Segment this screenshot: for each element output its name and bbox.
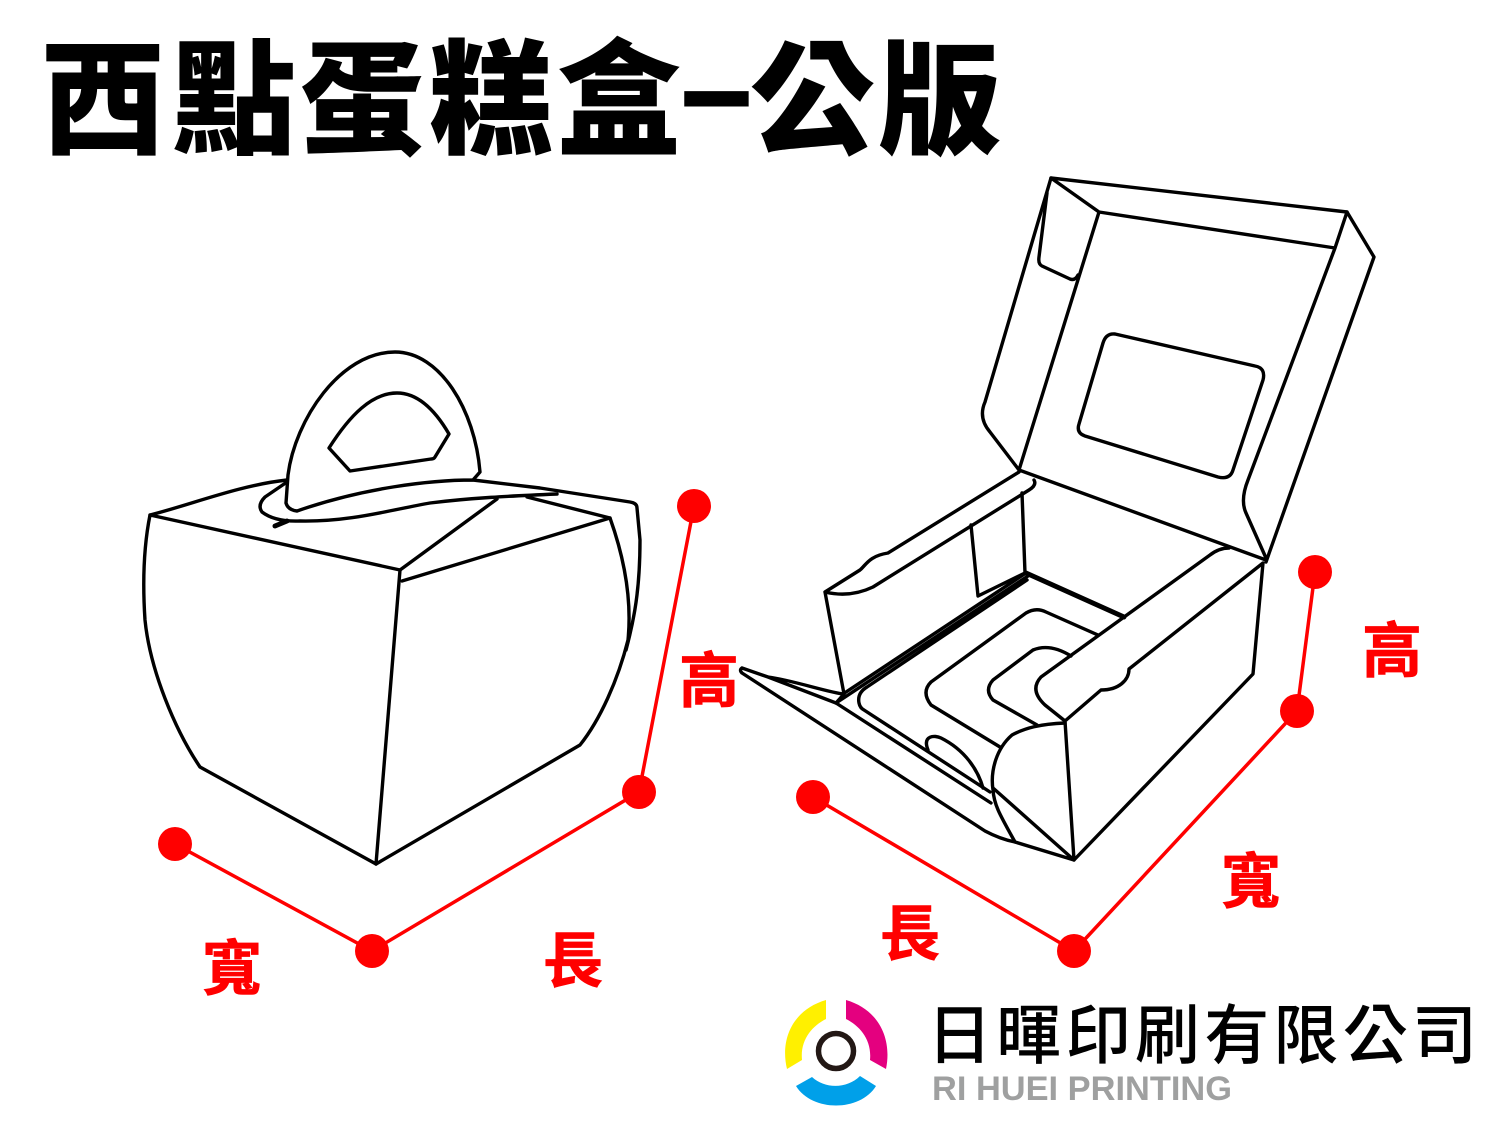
dimension lines: open box bbox=[796, 555, 1332, 968]
lid outer bbox=[982, 178, 1374, 562]
dimension lines: closed box bbox=[158, 489, 711, 968]
title: 公版 bbox=[750, 33, 1002, 171]
inner tray rim bbox=[836, 573, 1028, 792]
right flap bbox=[1036, 548, 1263, 860]
label: height, closed box: 高 bbox=[679, 648, 739, 715]
title: 西點蛋糕盒 bbox=[41, 33, 681, 171]
back panel bbox=[971, 493, 1025, 596]
back left flap bbox=[825, 472, 1035, 694]
handle opening bbox=[329, 393, 449, 471]
box left face bbox=[144, 515, 400, 864]
label: height, open box: 高 bbox=[1362, 618, 1422, 685]
handle outer bbox=[286, 352, 640, 650]
title: – bbox=[682, 21, 751, 159]
box right face bbox=[376, 518, 629, 864]
logo mark bbox=[785, 1000, 887, 1106]
company name, English: RI HUEI PRINTING bbox=[932, 1070, 1232, 1108]
label: width, open box: 寬 bbox=[1221, 849, 1281, 916]
handle base strap bbox=[260, 482, 557, 521]
label: length, open box: 長 bbox=[880, 901, 940, 968]
company name: 日暉印刷有限公司 bbox=[927, 999, 1477, 1072]
thumb notch bbox=[926, 736, 983, 788]
box top flaps bbox=[150, 480, 610, 581]
lid corner flap bbox=[1039, 193, 1078, 280]
front fold flap bbox=[740, 668, 1015, 842]
illustration: open window cake box bbox=[740, 178, 1374, 860]
front curved panel bbox=[992, 723, 1074, 860]
illustration: closed handle cake box bbox=[144, 352, 640, 864]
label: width, closed box: 寬 bbox=[202, 936, 262, 1003]
inner tray base bbox=[988, 648, 1071, 725]
lid window bbox=[1078, 334, 1264, 478]
inner tray step bbox=[926, 610, 1098, 747]
label: length, closed box: 長 bbox=[543, 928, 603, 995]
lid fold lines bbox=[1019, 178, 1347, 560]
